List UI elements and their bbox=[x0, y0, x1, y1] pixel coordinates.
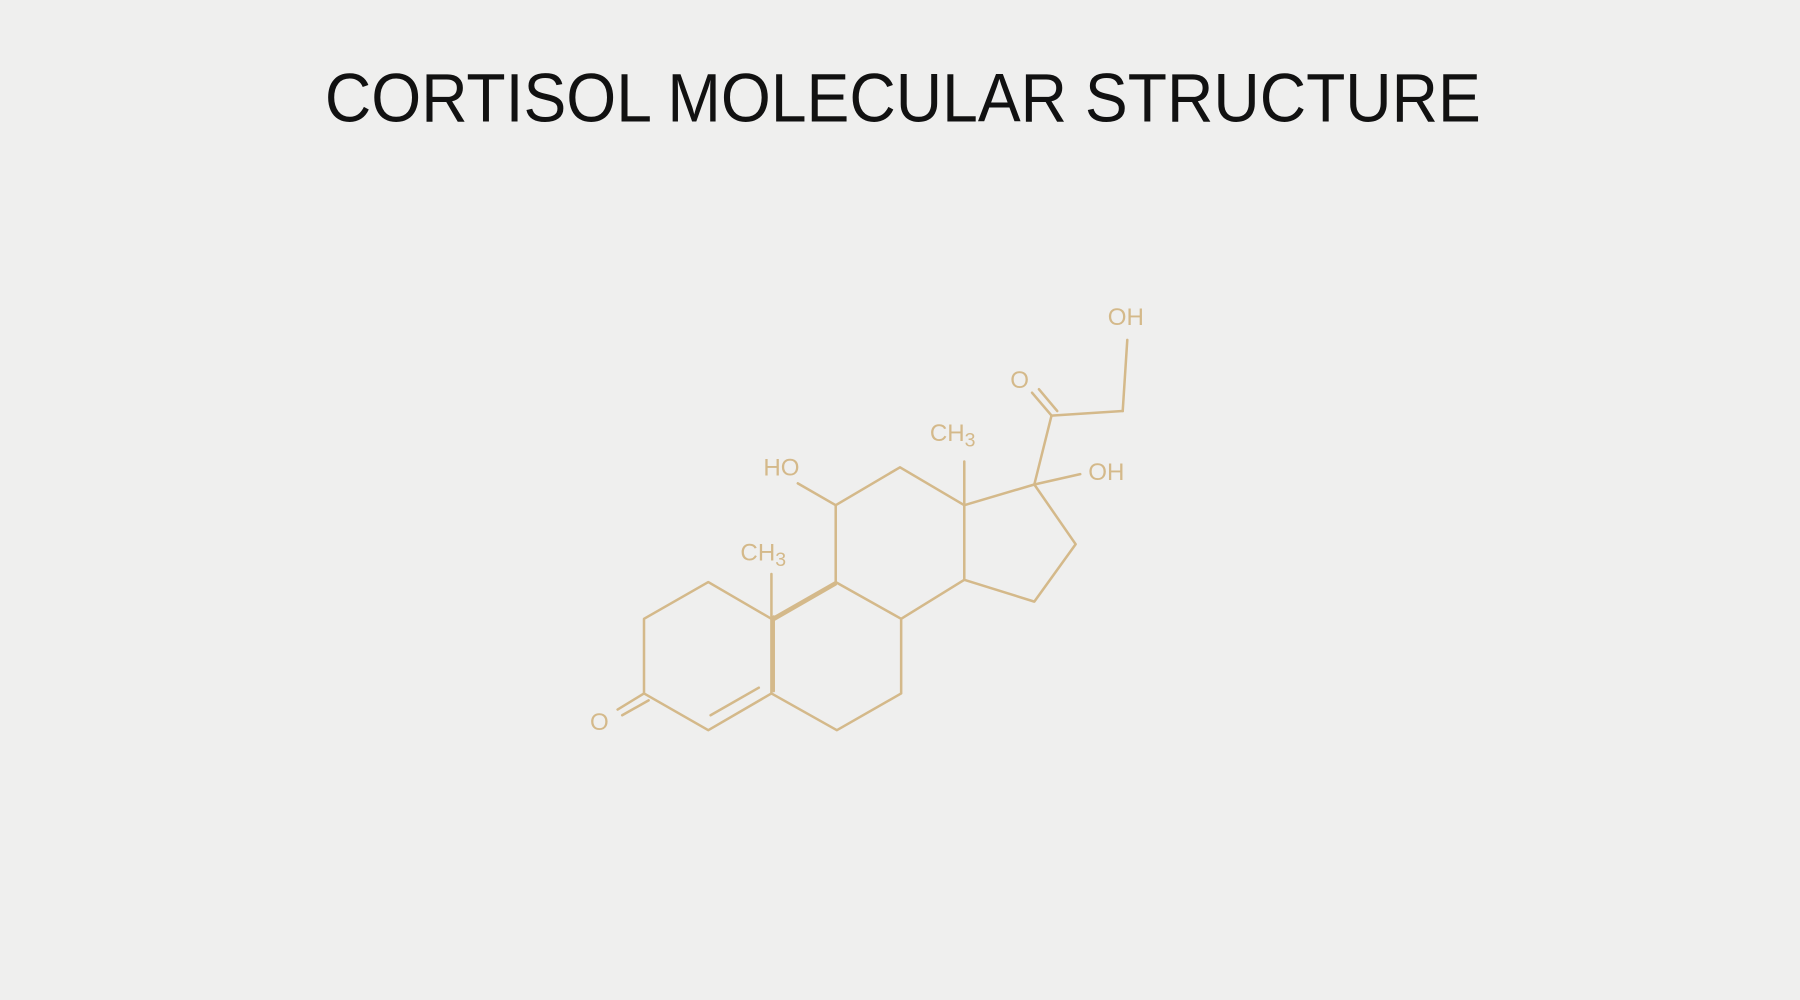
hydroxyl bonds bbox=[798, 474, 1080, 505]
atom labels: CH bbox=[740, 539, 775, 566]
atom labels: OH bbox=[1108, 304, 1144, 331]
molecule: cortisol skeletal structure bbox=[618, 340, 1127, 730]
title: CORTISOL MOLECULAR STRUCTURE bbox=[325, 60, 1481, 137]
side chain bbox=[1032, 340, 1127, 485]
ring D bbox=[964, 485, 1076, 602]
atom labels: 3 bbox=[965, 430, 976, 452]
atom labels: OH bbox=[1088, 459, 1124, 486]
atom labels: O bbox=[590, 709, 609, 736]
ring A bbox=[618, 582, 771, 730]
atom labels bbox=[590, 304, 1144, 736]
atom labels: O bbox=[1010, 367, 1029, 394]
atom labels: HO bbox=[763, 454, 800, 481]
ring B bbox=[771, 582, 901, 730]
ring C bbox=[836, 467, 964, 619]
methyl bonds bbox=[771, 462, 964, 619]
atom labels: CH bbox=[930, 420, 965, 447]
atom labels: 3 bbox=[775, 549, 786, 571]
